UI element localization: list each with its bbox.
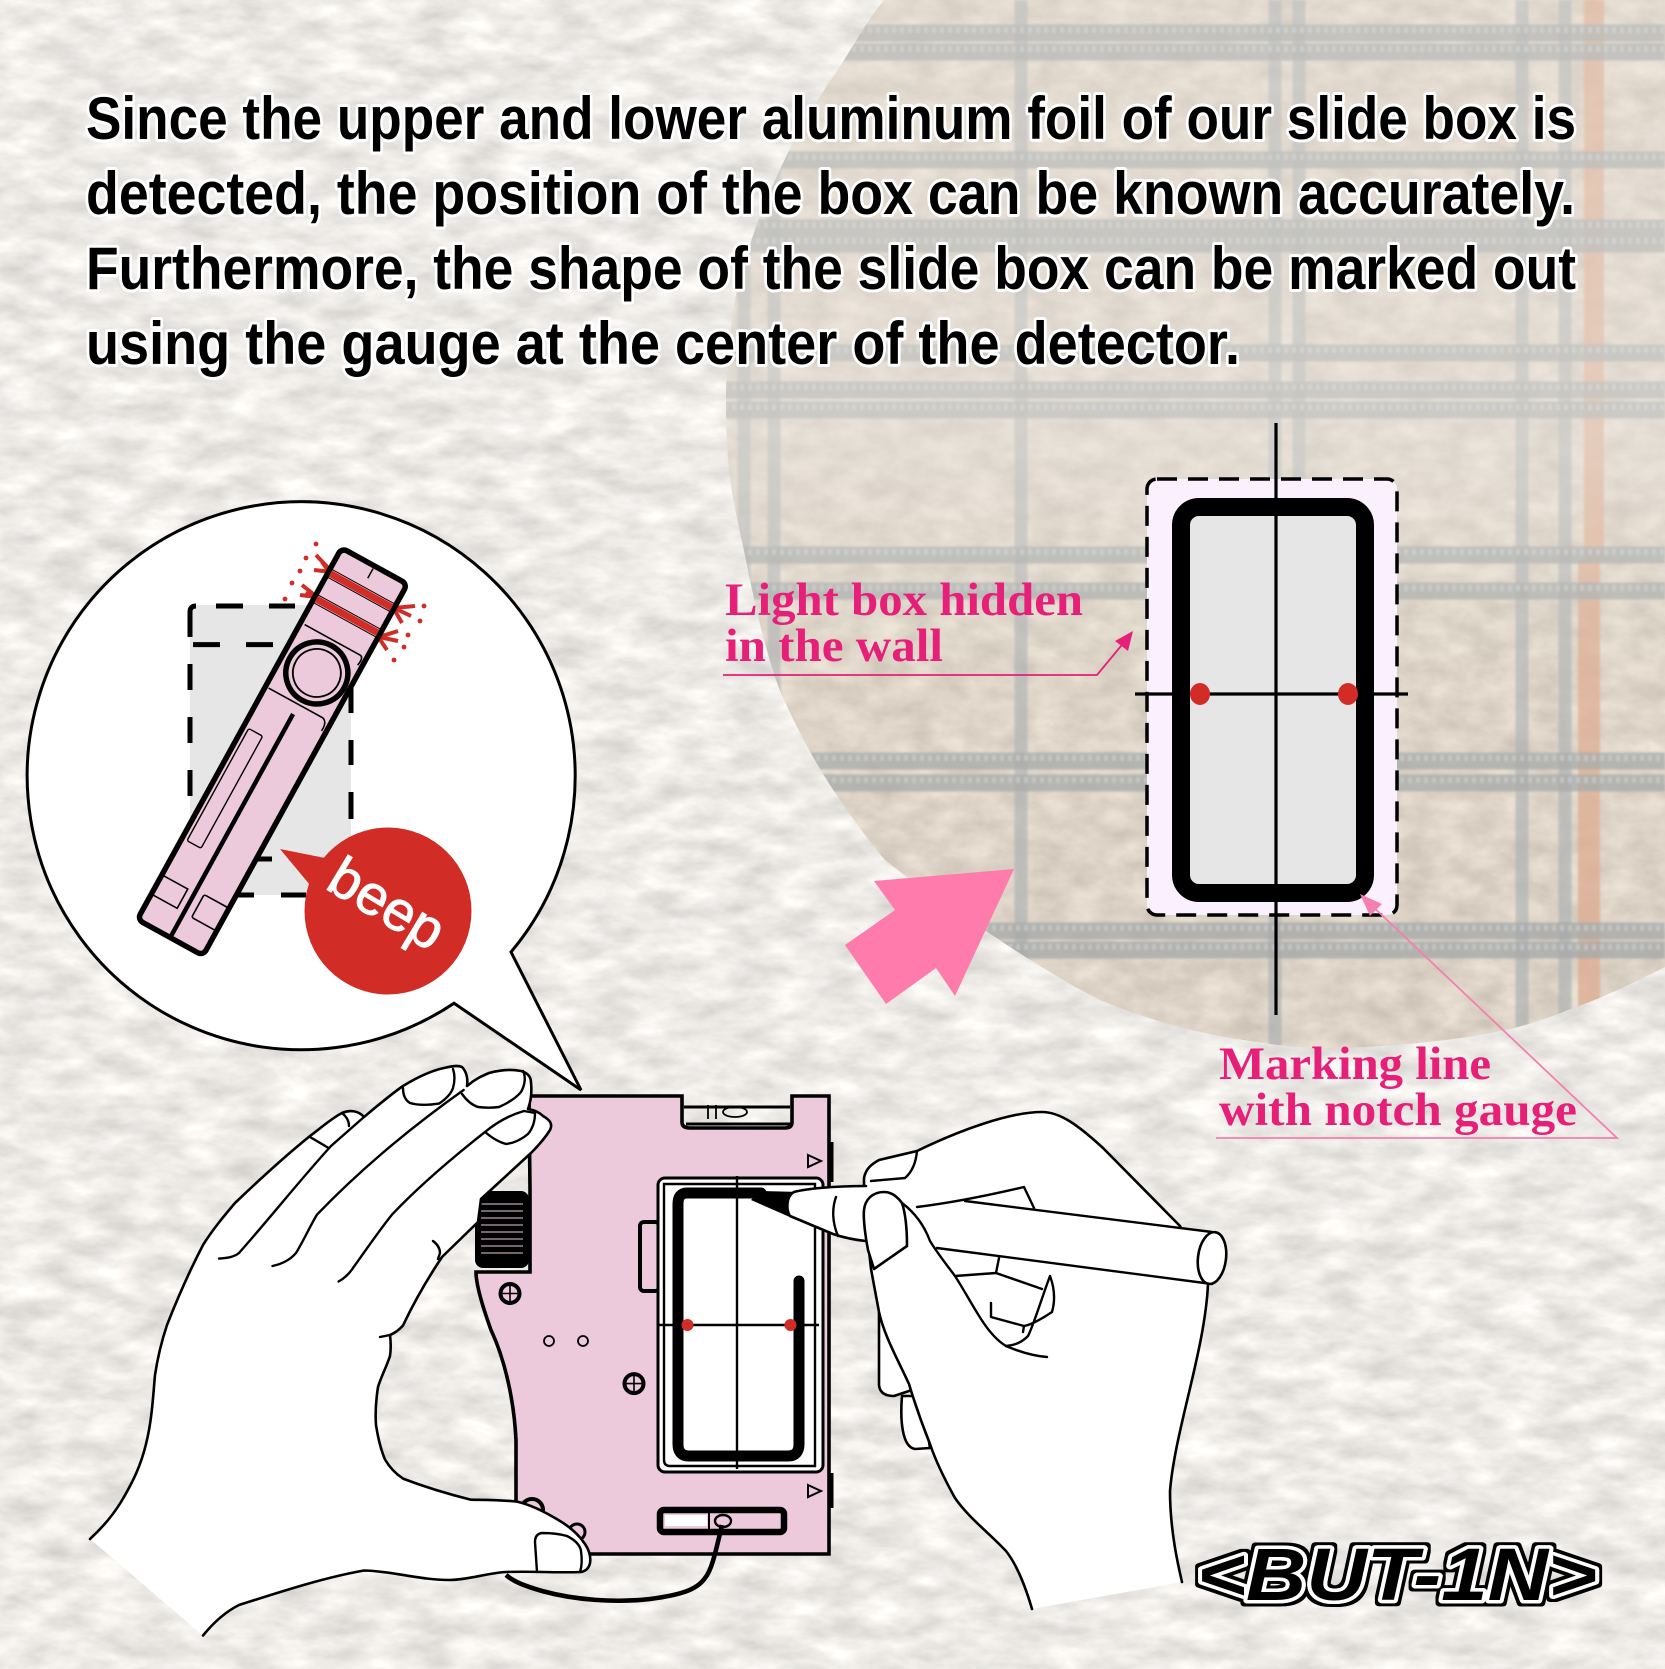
beep badge — [280, 828, 472, 994]
red notch dots — [1190, 683, 1358, 705]
vertical rebars — [744, 0, 1565, 1060]
callout: marking line with notch gauge: with notch gauge — [1219, 1084, 1577, 1136]
pen — [925, 1201, 1229, 1286]
wall photo: rebar grid seen through the wall — [700, 0, 1665, 1060]
side clip — [640, 1222, 659, 1291]
triangle marks — [808, 1155, 821, 1497]
diagram: light box with marking line — [1135, 423, 1408, 1015]
product logo: <BUT-1N> — [1197, 1533, 1597, 1616]
callout: marking line with notch gauge: Marking line — [1219, 1038, 1491, 1090]
thumb nail — [535, 1533, 582, 1572]
left hand holding detector — [90, 1066, 590, 1636]
index finger tip — [787, 1186, 866, 1241]
light box hidden area — [1147, 479, 1397, 915]
heading text — [86, 85, 1576, 377]
thumb web — [917, 1187, 1034, 1208]
marking line outline — [1181, 507, 1365, 893]
cord — [506, 1525, 722, 1601]
screws and holes — [500, 1284, 644, 1540]
finger lines — [219, 1117, 364, 1259]
knuckle creases — [380, 1241, 440, 1337]
callout: light box hidden in the wall: in the wall — [725, 620, 943, 672]
hand outline — [864, 1112, 1208, 1609]
beep badge: beep — [318, 844, 457, 962]
red beep sparks — [283, 542, 426, 662]
heading text: using the gauge at the center of the detector. — [86, 310, 1240, 377]
thumb over pen — [864, 1192, 907, 1269]
detector front body — [475, 1096, 831, 1554]
folded fingers behind — [879, 1310, 912, 1396]
grey dashed box — [190, 605, 351, 895]
callout: marking line with notch gauge — [1216, 894, 1617, 1138]
drawn marking line — [678, 1193, 799, 1456]
gauge window — [657, 1176, 823, 1472]
callout: light box hidden in the wall: Light box hidden — [725, 574, 1083, 626]
detector side view — [137, 548, 407, 956]
finger nails — [310, 1113, 349, 1148]
big pink arrow — [845, 869, 1014, 1004]
palm fold lines — [955, 1258, 1054, 1357]
centre cross lines — [1135, 423, 1408, 1015]
knob — [475, 1191, 529, 1268]
speech bubble — [27, 502, 581, 1090]
side tabs — [828, 1142, 834, 1508]
pen nib — [751, 1191, 800, 1218]
callout: light box hidden in the wall — [723, 574, 1133, 675]
horizontal rebars — [700, 33, 1665, 950]
top level vial — [684, 1105, 790, 1124]
bottom cord slot — [660, 1510, 784, 1532]
right hand holding pen — [751, 1112, 1229, 1609]
orange stripe — [1578, 0, 1604, 1060]
